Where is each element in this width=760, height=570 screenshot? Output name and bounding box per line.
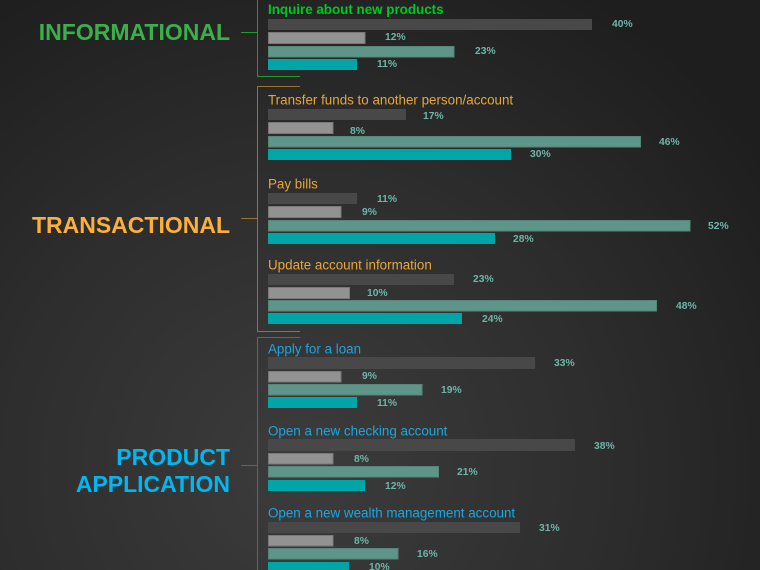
chart: wealth bars: 31%: [539, 523, 560, 534]
chart: loan bars: 9%: [362, 371, 377, 382]
chart: checking bars: 8%: [354, 454, 369, 465]
chart: inquire bars: 23%: [475, 46, 496, 57]
chart: pay bills bars: [268, 193, 729, 245]
title: loan: Apply for a loan: [268, 342, 361, 356]
bracket: transactional: [241, 86, 300, 332]
chart: inquire bars: 40%: [612, 19, 633, 30]
title: wealth: Open a new wealth management account: [268, 506, 515, 520]
chart: update bars: 23%: [473, 274, 494, 285]
title: transfer: Transfer funds to another person/account: [268, 92, 513, 108]
chart: loan bars: [268, 357, 575, 409]
chart: pay bills bars: 11%: [377, 194, 397, 205]
chart: checking bars: [268, 439, 615, 492]
chart: checking bars: 12%: [385, 481, 406, 492]
title: pay bills: Pay bills: [268, 176, 318, 192]
title: inquire: Inquire about new products: [268, 2, 444, 17]
chart: update bars: 24%: [482, 314, 503, 325]
title: checking: Open a new checking account: [268, 424, 448, 438]
chart: transfer bars: 17%: [423, 111, 444, 122]
chart: update bars: 10%: [367, 288, 388, 299]
chart: checking bars: 21%: [457, 467, 478, 478]
panel: transfer funds: [268, 92, 680, 160]
chart: pay bills bars: 28%: [513, 234, 534, 245]
heading: informational: INFORMATIONAL: [39, 19, 230, 45]
panel: inquire about new products: [268, 2, 633, 70]
chart: wealth bars: 8%: [354, 536, 369, 547]
panel: apply for a loan: [268, 342, 575, 409]
chart: inquire bars: 12%: [385, 32, 406, 43]
chart: loan bars: 19%: [441, 385, 462, 396]
panel: open checking: [268, 424, 615, 492]
chart: pay bills bars: 9%: [362, 207, 377, 218]
chart: loan bars: 11%: [377, 398, 397, 409]
panel: update account: [268, 258, 697, 325]
chart: transfer bars: 46%: [659, 137, 680, 148]
chart: transfer bars: 8%: [350, 126, 365, 137]
chart: loan bars: 33%: [554, 358, 575, 369]
bracket: informational: [241, 0, 300, 76]
bracket: product application: [241, 338, 300, 570]
chart: pay bills bars: 52%: [708, 221, 729, 232]
chart: wealth bars: 16%: [417, 549, 438, 560]
heading: transactional: TRANSACTIONAL: [32, 212, 230, 238]
title: update account: Update account information: [268, 258, 432, 272]
heading: product application: PRODUCT: [116, 444, 230, 470]
heading: product application: APPLICATION: [76, 471, 230, 497]
chart: transfer bars: [268, 109, 680, 160]
chart: update bars: 48%: [676, 301, 697, 312]
chart: update bars: [268, 274, 697, 325]
chart: inquire bars: 11%: [377, 59, 397, 70]
panel: pay bills: [268, 176, 729, 245]
chart: checking bars: 38%: [594, 441, 615, 452]
chart: wealth bars: [268, 522, 560, 570]
chart: transfer bars: 30%: [530, 149, 551, 160]
panel: open wealth management: [268, 506, 560, 570]
chart: inquire bars: [268, 19, 633, 70]
